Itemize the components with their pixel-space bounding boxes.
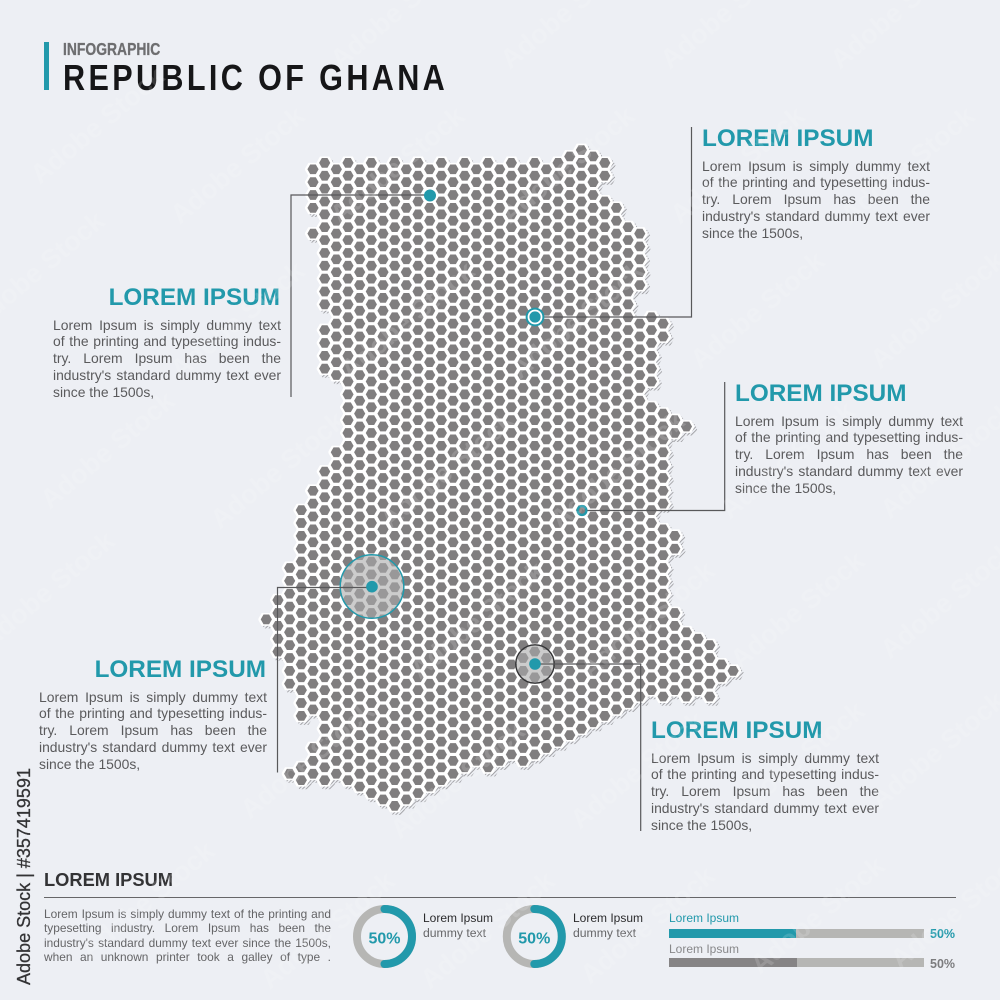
watermark: Adobe Stock — [385, 715, 531, 845]
callout text: Lorem Ipsum is simply dummy text — [651, 750, 879, 766]
watermark: Adobe Stock — [505, 255, 651, 385]
callout text: of the printing and typesetting indus- — [53, 333, 281, 349]
hatched map shadow — [263, 148, 741, 820]
progress bar 2 — [669, 942, 955, 971]
callout text: of the printing and typesetting indus- — [702, 174, 930, 190]
donut 1 label — [423, 911, 493, 940]
watermark: Adobe Stock — [835, 100, 981, 230]
leader line: south callout — [535, 664, 641, 831]
leader line: north-west callout — [291, 195, 430, 397]
callout: south-west — [39, 656, 267, 772]
stock id vertical text: Adobe Stock | #357419591 — [13, 768, 34, 985]
callout text: industry's standard dummy text ever — [651, 800, 879, 816]
donut 2 label: Lorem Ipsum — [573, 911, 643, 925]
watermark: Adobe Stock — [745, 850, 891, 980]
watermark: Adobe Stock — [235, 695, 381, 825]
callout text: try. Lorem Ipsum has been the — [651, 783, 879, 799]
marker: south dot — [529, 658, 541, 670]
callout text: try. Lorem Ipsum has been the — [702, 191, 930, 207]
callout text: since the 1500s, — [53, 384, 154, 400]
watermark: Adobe Stock — [685, 245, 831, 375]
callout text — [735, 412, 963, 496]
callout: east — [735, 380, 963, 496]
watermark: Adobe Stock — [165, 100, 311, 230]
callout: north-west — [53, 284, 281, 400]
callout text: try. Lorem Ipsum has been the — [735, 446, 963, 462]
watermark: Adobe Stock — [375, 405, 521, 535]
callout text: of the printing and typesetting indus- — [735, 429, 963, 445]
leader line: north callout — [535, 127, 692, 317]
footer paragraph: when an unknown printer took a galley of type . — [44, 950, 331, 964]
callout text — [39, 688, 267, 772]
marker: north-west dot — [424, 190, 436, 202]
donut chart 1 — [357, 909, 412, 964]
watermark: Adobe Stock — [255, 865, 401, 995]
callout text — [53, 316, 281, 400]
callout heading: LOREM IPSUM — [735, 380, 906, 407]
donut 2 label — [573, 911, 643, 940]
callout text: since the 1500s, — [651, 817, 752, 833]
callout text: Lorem Ipsum is simply dummy text — [53, 316, 281, 332]
watermark: Adobe Stock — [575, 555, 721, 685]
callout heading: LOREM IPSUM — [109, 284, 280, 311]
progress bar 1: Lorem Ipsum — [669, 911, 739, 925]
marker: east ring — [578, 506, 586, 515]
watermark: Adobe Stock — [165, 255, 311, 385]
footer paragraph — [44, 906, 331, 964]
callout text: of the printing and typesetting indus- — [651, 766, 879, 782]
callout text: since the 1500s, — [702, 225, 803, 241]
callout: north — [702, 125, 930, 241]
callout text: since the 1500s, — [735, 480, 836, 496]
white map underlay — [261, 145, 739, 817]
leader line: east callout — [582, 382, 725, 510]
callout text: Lorem Ipsum is simply dummy text — [39, 688, 267, 704]
callout heading: LOREM IPSUM — [95, 656, 266, 683]
title accent bar — [44, 42, 49, 90]
watermark: Adobe Stock — [565, 705, 711, 835]
highlight circle: south — [516, 645, 554, 683]
watermark: Adobe Stock — [205, 405, 351, 535]
watermark: Adobe Stock — [725, 695, 871, 825]
watermark: Adobe Stock — [665, 100, 811, 230]
callout text: Lorem Ipsum is simply dummy text — [702, 158, 930, 174]
callout text — [651, 750, 879, 833]
callout text: since the 1500s, — [39, 756, 140, 772]
callout text: try. Lorem Ipsum has been the — [53, 350, 281, 366]
watermark: Adobe Stock — [495, 100, 641, 230]
callout heading: LOREM IPSUM — [702, 125, 873, 152]
watermark: Adobe Stock — [325, 100, 471, 230]
leader line: south-west callout — [278, 588, 372, 772]
callout text: industry's standard dummy text ever — [735, 463, 963, 479]
callout text: industry's standard dummy text ever — [53, 367, 281, 383]
watermark: Adobe Stock — [335, 255, 481, 385]
watermark: Adobe Stock — [725, 545, 871, 675]
donut 1 label: Lorem Ipsum — [423, 911, 493, 925]
donut chart 1: 50% — [368, 930, 401, 948]
callout text: Lorem Ipsum is simply dummy text — [735, 412, 963, 428]
donut 1 label: dummy text — [423, 926, 487, 940]
progress bar 1 — [669, 911, 955, 941]
donut 2 label: dummy text — [573, 926, 637, 940]
hexagon dot map of Ghana — [261, 145, 739, 817]
highlight circle: south-west — [340, 555, 404, 618]
title kicker: INFOGRAPHIC — [63, 41, 160, 59]
watermark: Adobe Stock — [75, 835, 221, 965]
footer paragraph: Lorem Ipsum is simply dummy text of the printing and — [44, 906, 331, 920]
footer paragraph: typesetting industry. Lorem Ipsum has been the — [44, 921, 331, 935]
marker: north ringed dot — [526, 308, 544, 326]
progress bar 1: 50% — [930, 927, 955, 941]
marker: south-west dot — [366, 581, 378, 592]
callout heading: LOREM IPSUM — [651, 717, 822, 744]
donut chart 2 — [507, 909, 562, 964]
watermark: Adobe Stock — [25, 60, 171, 190]
donut chart 2: 50% — [518, 930, 550, 948]
progress bar 2: 50% — [930, 957, 955, 971]
callout text: industry's standard dummy text ever — [702, 208, 930, 224]
callout text: industry's standard dummy text ever — [39, 739, 267, 755]
callout: south — [651, 717, 879, 833]
callout text — [702, 158, 930, 241]
watermark: Adobe Stock — [405, 555, 551, 685]
footer heading: LOREM IPSUM — [44, 869, 173, 890]
watermark: Adobe Stock — [545, 405, 691, 535]
watermark: Adobe Stock — [575, 860, 721, 990]
footer divider — [44, 896, 956, 898]
callout text: try. Lorem Ipsum has been the — [39, 722, 267, 738]
watermark: Adobe Stock — [415, 865, 561, 995]
watermark: Adobe Stock — [35, 385, 181, 515]
watermark: Adobe Stock — [715, 395, 861, 525]
footer paragraph: industry's standard dummy text ever since the 1500s, — [44, 936, 331, 950]
progress bar 2: Lorem Ipsum — [669, 942, 739, 956]
callout text: of the printing and typesetting indus- — [39, 705, 267, 721]
main title: REPUBLIC OF GHANA — [63, 59, 448, 99]
title block — [44, 41, 448, 99]
